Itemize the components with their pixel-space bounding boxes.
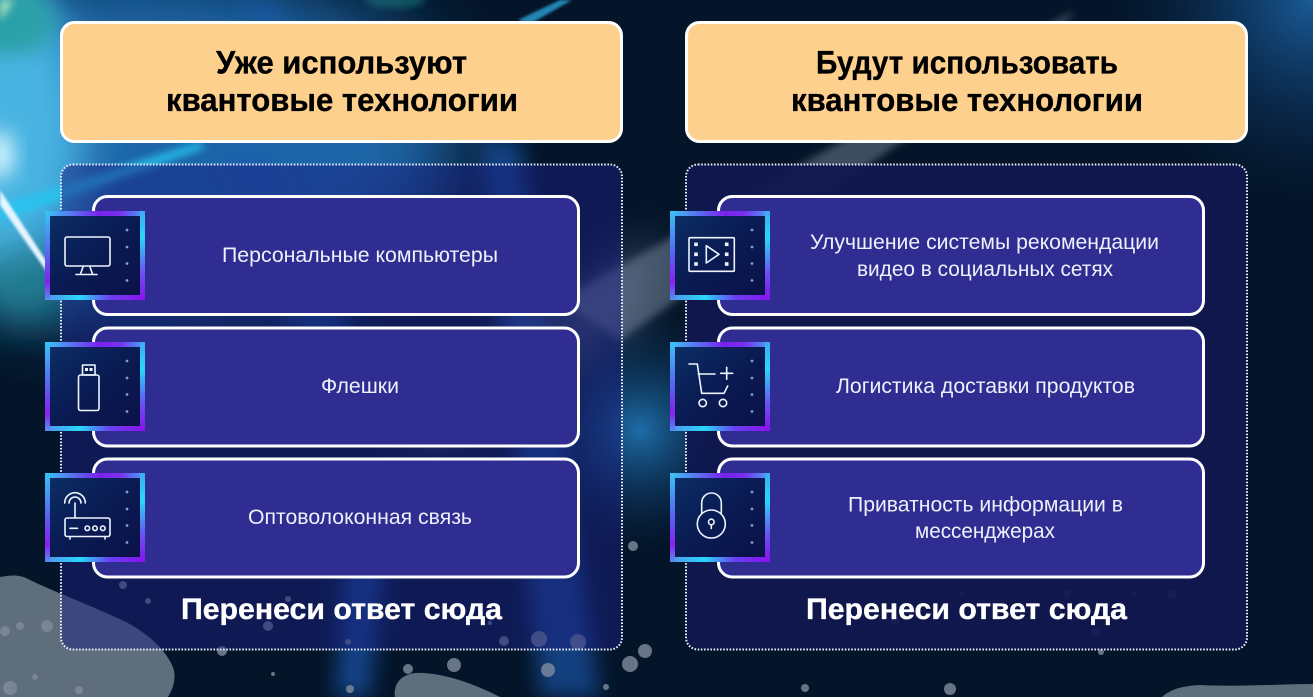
card: fiber optics: [94, 459, 578, 577]
card: delivery logistics: Логистика доставки продуктов: [836, 375, 1135, 398]
header: will use: квантовые технологии: [791, 82, 1143, 118]
card: messenger privacy: [718, 459, 1204, 577]
card: fiber optics: Оптоволоконная связь: [248, 506, 472, 529]
icon: monitor: [45, 211, 145, 300]
card: messenger privacy: Приватность информации в: [848, 494, 1123, 516]
card: flash drives: [94, 328, 578, 446]
icon: padlock: [670, 473, 770, 562]
panel: already use: [45, 164, 622, 650]
call to action: right: Перенеси ответ сюда: [806, 593, 1127, 626]
panel: will use: [670, 164, 1247, 650]
icon: usb drive: [45, 342, 145, 431]
header: will use: [686, 22, 1246, 142]
icon: router: [45, 473, 145, 562]
card: flash drives: Флешки: [321, 375, 399, 398]
header: already use: Уже используют: [216, 44, 467, 80]
card: video recommendations: [718, 196, 1204, 314]
card: personal computers: Персональные компьютеры: [222, 244, 498, 267]
call to action: left: Перенеси ответ сюда: [181, 593, 502, 626]
card: messenger privacy: мессенджерах: [915, 520, 1055, 543]
card: personal computers: [94, 196, 578, 314]
header: already use: квантовые технологии: [166, 82, 518, 118]
header: already use: [62, 22, 622, 142]
card: delivery logistics: [718, 328, 1204, 446]
card: video recommendations: Улучшение системы рекомендации: [810, 231, 1159, 254]
icon: video: [670, 211, 770, 300]
icon: shopping cart: [670, 342, 770, 431]
card: video recommendations: видео в социальных сетях: [857, 258, 1113, 281]
header: will use: Будут использовать: [816, 44, 1118, 80]
